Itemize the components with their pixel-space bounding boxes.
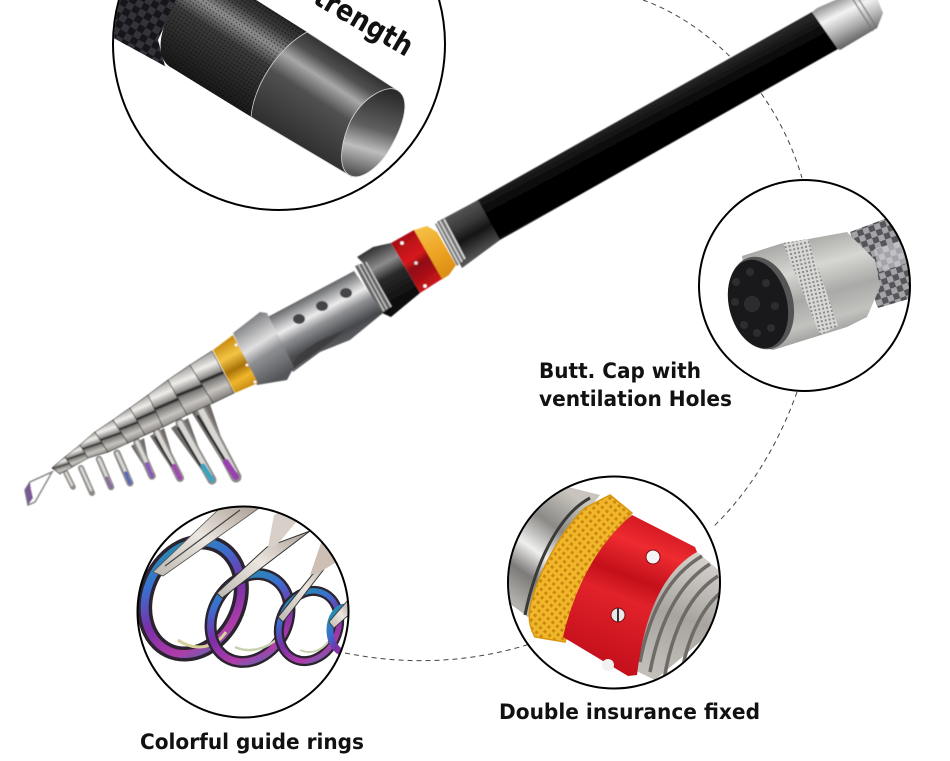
label: double insurance: Double insurance fixed xyxy=(499,700,760,724)
circle outline xyxy=(508,476,720,688)
mesh sleeve xyxy=(161,0,307,118)
label: butt cap: ventilation Holes xyxy=(539,387,732,411)
upper thread xyxy=(435,219,466,266)
guide frames xyxy=(153,506,352,628)
silver end cap body xyxy=(742,232,880,350)
carbon section xyxy=(114,0,176,70)
tip top guide xyxy=(25,472,52,505)
tube opening xyxy=(342,89,405,177)
label: butt cap xyxy=(539,359,732,411)
label: guide rings: Colorful guide rings xyxy=(140,730,364,754)
lower thread xyxy=(355,262,392,314)
rod butt section: black blank xyxy=(476,12,838,241)
red collar xyxy=(563,515,697,676)
dark collar below blank xyxy=(437,200,500,268)
telescopic sections xyxy=(52,351,234,474)
gold lower ring xyxy=(213,335,258,393)
folded guides xyxy=(66,404,236,493)
silver section xyxy=(509,488,600,617)
knurled band xyxy=(783,239,838,335)
circle outline xyxy=(699,180,910,391)
detail circle: carbon strength xyxy=(108,0,445,210)
gold knurled ring xyxy=(529,495,632,642)
detail circle: butt cap xyxy=(699,180,915,391)
red reel seat ring xyxy=(391,230,442,293)
ring 2 xyxy=(204,568,296,668)
detail circle: double insurance xyxy=(500,476,724,688)
gold locking ring xyxy=(414,226,456,280)
ring 4 xyxy=(326,604,344,654)
carbon shaft xyxy=(850,218,915,308)
rod butt end cap xyxy=(812,0,883,50)
circle outline xyxy=(113,0,445,210)
ring 3 xyxy=(274,586,344,666)
ring 1 xyxy=(138,536,249,662)
dashed connector arcs xyxy=(345,0,802,661)
detail circle: colorful guide rings xyxy=(127,506,362,718)
clear outer sheath xyxy=(251,32,397,177)
black rubber cap xyxy=(728,256,794,350)
thread xyxy=(638,552,719,680)
grip collar xyxy=(233,312,294,385)
reel seat tube with vent holes xyxy=(262,271,383,378)
label: butt cap: Butt. Cap with xyxy=(539,359,701,383)
circle outline xyxy=(138,506,348,718)
fishing rod xyxy=(25,0,883,505)
black collar xyxy=(357,243,420,317)
